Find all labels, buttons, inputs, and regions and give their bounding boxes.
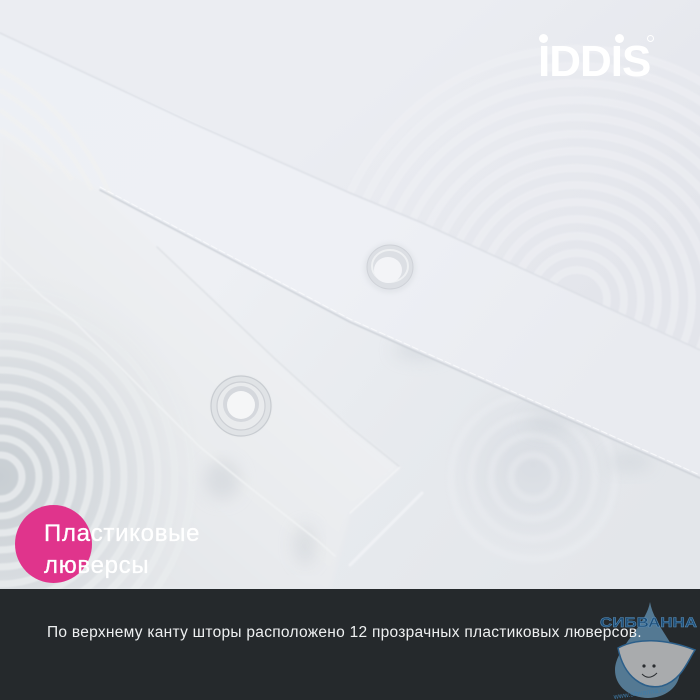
concentric circles pattern: lower left xyxy=(0,338,139,589)
heading: plastic eyelets: Пластиковые xyxy=(44,520,200,547)
pink circle accent xyxy=(15,505,92,583)
dark caption bar xyxy=(0,589,700,700)
caption text: По верхнему канту шторы расположено 12 прозрачных пластиковых люверсов. xyxy=(47,624,642,641)
panel: upper curtain area xyxy=(0,0,700,350)
fold edges and stitching xyxy=(0,33,700,565)
eyelet: upper grommet xyxy=(364,243,416,293)
heading: plastic eyelets xyxy=(44,520,200,579)
eyelet: lower grommet xyxy=(210,375,272,437)
bathtub xyxy=(618,641,695,687)
water drop xyxy=(615,602,680,698)
heading: plastic eyelets: люверсы xyxy=(44,552,149,579)
concentric arcs: upper left xyxy=(0,70,112,200)
brand name: СИБВАННА xyxy=(600,614,697,630)
logo: iDDiS: IDDIS xyxy=(538,37,650,86)
concentric circles pattern: upper right xyxy=(326,49,700,551)
watermark: Sibvanna bathtub drop logo xyxy=(600,602,697,700)
fold shadows xyxy=(402,348,641,468)
panel: lower curtain area xyxy=(402,348,641,492)
flap: lower left folded hem xyxy=(0,135,400,589)
concentric circles pattern: lower right xyxy=(451,395,615,559)
flap: upper hem band xyxy=(0,33,700,478)
fold shadows on flap xyxy=(206,462,314,559)
bathtub face xyxy=(642,664,657,677)
